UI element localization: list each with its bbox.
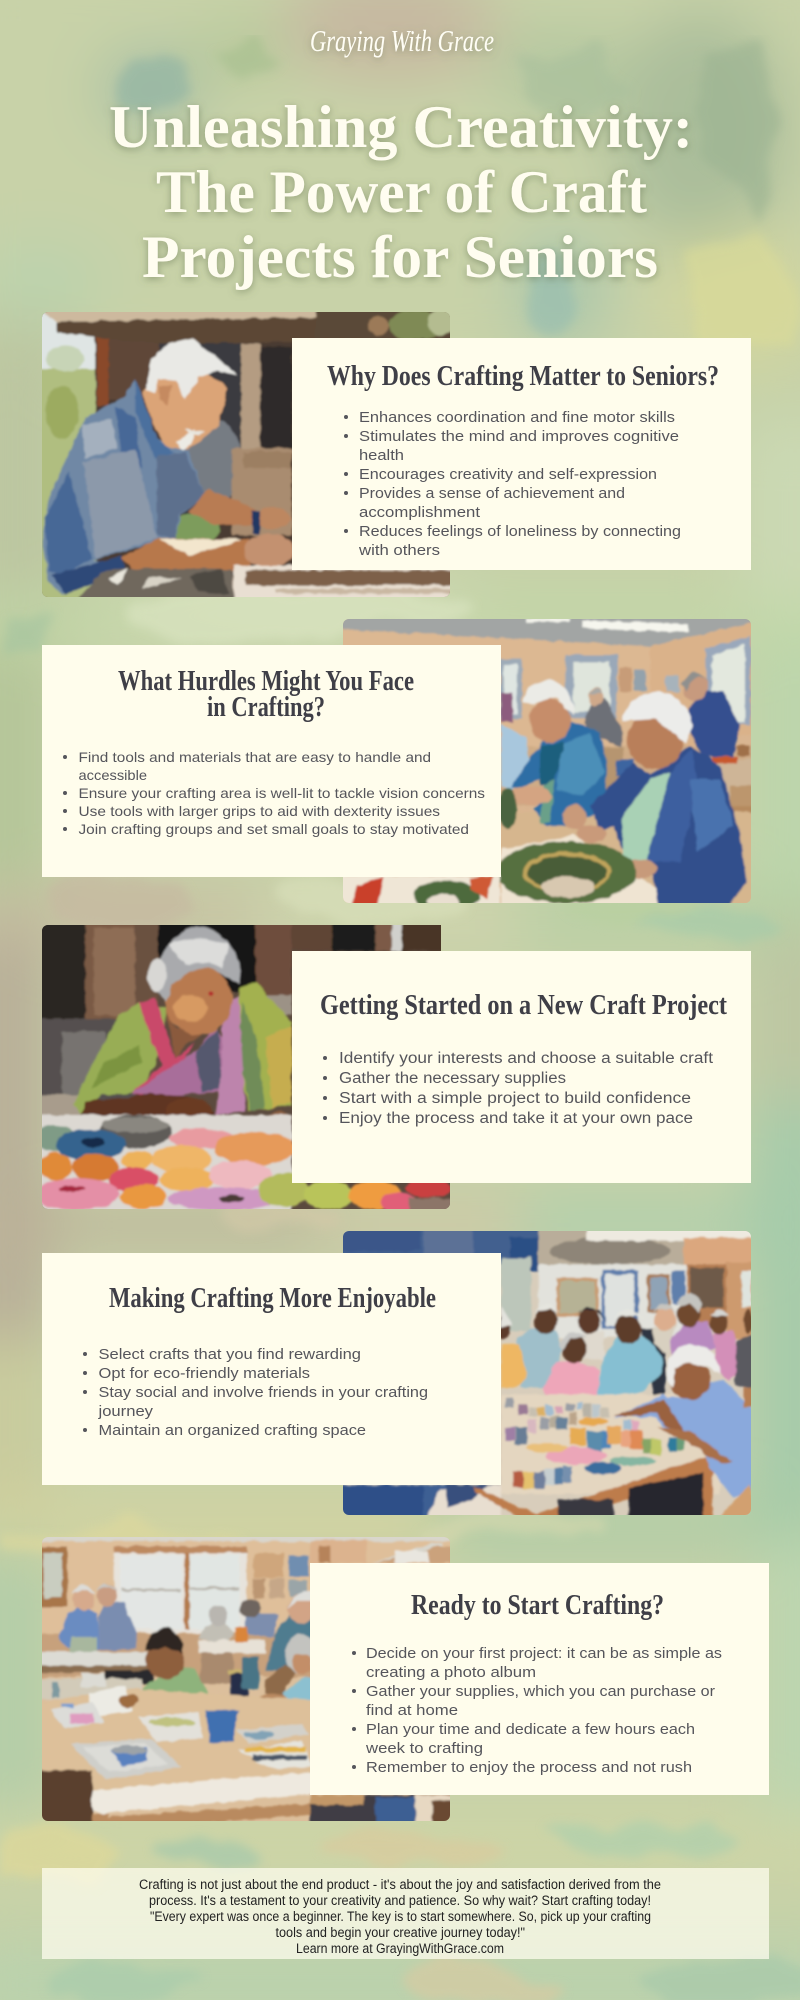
bullet list: Use tools with larger grips to aid with dexterity issues xyxy=(78,803,440,819)
bullet list: Gather the necessary supplies xyxy=(339,1070,566,1087)
bullet list: Remember to enjoy the process and not rush xyxy=(366,1760,692,1776)
panel: ready to start xyxy=(35,1530,769,1830)
bullet list: find at home xyxy=(366,1703,458,1719)
main title: Unleashing Creativity: xyxy=(109,94,693,160)
brand name: Graying With Grace: Graying With Grace xyxy=(310,23,494,58)
panel: getting started xyxy=(34,918,751,1218)
bullet list: Enjoy the process and take it at your own pace xyxy=(339,1110,693,1127)
bullet list: Select crafts that you find rewarding xyxy=(98,1347,361,1363)
text card xyxy=(310,1563,769,1795)
bullet list: Plan your time and dedicate a few hours each xyxy=(366,1722,695,1738)
image: seniors making wreaths in a classroom xyxy=(337,612,760,912)
bullet list: Reduces feelings of loneliness by connecting xyxy=(359,523,681,540)
bullet list: Stay social and involve friends in your crafting xyxy=(98,1385,428,1401)
bullet list: Gather your supplies, which you can purchase or xyxy=(366,1684,715,1700)
bullet list: Decide on your first project: it can be as simple as xyxy=(366,1646,722,1662)
footer callout: Learn more at GrayingWithGrace.com xyxy=(296,1941,504,1956)
heading xyxy=(118,666,414,723)
panel: why crafting matters xyxy=(35,305,751,605)
text card xyxy=(42,1253,501,1485)
bullet list xyxy=(352,1646,722,1776)
image: elderly man crafting at a wooden shed xyxy=(35,305,460,605)
text card xyxy=(292,338,751,570)
bullet list xyxy=(323,1050,714,1127)
image: woman working with colorful yarn xyxy=(34,918,459,1218)
image: art class with seniors and a child painting xyxy=(35,1530,459,1830)
heading: What Hurdles Might You Face xyxy=(118,666,414,697)
bullet list: health xyxy=(359,447,404,464)
footer callout: process. It's a testament to your creativity and patience. So why wait? Start crafting today! xyxy=(149,1893,651,1908)
panel: making crafting enjoyable xyxy=(42,1224,763,1524)
bullet list: Enhances coordination and fine motor skills xyxy=(359,409,675,426)
panel: hurdles in crafting xyxy=(42,612,760,912)
bullet list: Stimulates the mind and improves cognitive xyxy=(359,428,679,445)
heading: Making Crafting More Enjoyable xyxy=(109,1283,436,1314)
footer callout: Crafting is not just about the end product - it's about the joy and satisfaction derived from the xyxy=(139,1877,661,1892)
bullet list: accomplishment xyxy=(359,504,481,521)
bullet list: with others xyxy=(358,542,440,559)
text card xyxy=(42,645,501,877)
bullet list: accessible xyxy=(78,767,147,783)
heading: in Crafting? xyxy=(207,692,325,723)
bullet list: Start with a simple project to build confidence xyxy=(339,1090,691,1107)
footer callout: "Every expert was once a beginner. The key is to start somewhere. So, pick up your crafting xyxy=(150,1909,651,1924)
bullet list xyxy=(344,409,681,559)
main title: Projects for Seniors xyxy=(142,224,658,290)
bullet list xyxy=(63,749,485,837)
main title: The Power of Craft xyxy=(156,159,647,225)
bullet list: Opt for eco-friendly materials xyxy=(98,1366,310,1382)
main title xyxy=(109,94,693,290)
bullet list: Ensure your crafting area is well-lit to tackle vision concerns xyxy=(78,785,485,801)
heading: Why Does Crafting Matter to Seniors? xyxy=(327,361,719,392)
bullet list: week to crafting xyxy=(365,1741,483,1757)
bullet list: Join crafting groups and set small goals to stay motivated xyxy=(78,821,469,837)
image: group of seniors sharing a craft table xyxy=(337,1224,763,1524)
bullet list: creating a photo album xyxy=(366,1665,536,1681)
bullet list: journey xyxy=(97,1404,154,1420)
bullet list xyxy=(83,1347,428,1439)
heading: Getting Started on a New Craft Project xyxy=(320,990,728,1021)
footer callout xyxy=(42,1868,769,1959)
footer callout: tools and begin your creative journey today!" xyxy=(276,1925,525,1940)
bullet list: Maintain an organized crafting space xyxy=(98,1423,366,1439)
text card xyxy=(292,951,751,1183)
heading: Ready to Start Crafting? xyxy=(411,1590,664,1621)
bullet list: Identify your interests and choose a suitable craft xyxy=(339,1050,714,1067)
bullet list: Encourages creativity and self-expression xyxy=(359,466,657,483)
bullet list: Find tools and materials that are easy to handle and xyxy=(78,749,431,765)
bullet list: Provides a sense of achievement and xyxy=(359,485,625,502)
